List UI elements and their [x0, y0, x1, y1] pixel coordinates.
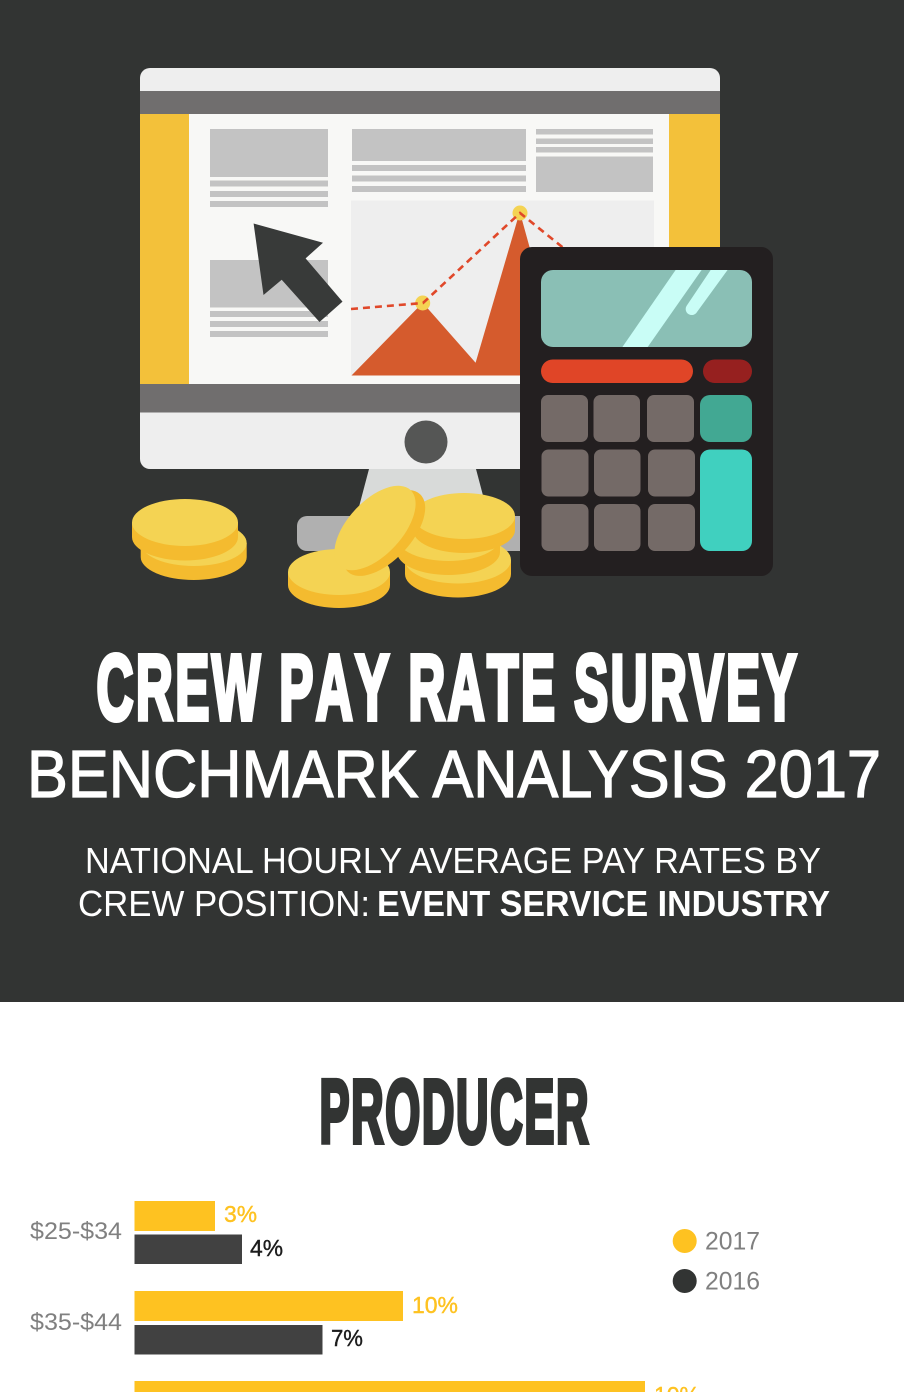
description text: EVENT SERVICE INDUSTRY: [377, 883, 830, 924]
icon: left coin stack: [132, 499, 247, 580]
description text: CREW POSITION:: [78, 883, 370, 924]
description text: [78, 840, 830, 924]
row: $35-$44: 10%: [412, 1292, 458, 1318]
panel: white chart background: [0, 1002, 904, 1392]
chart on monitor screen: [351, 200, 654, 376]
row: $25-$34: [30, 1201, 283, 1264]
row: $35-$44: $35-$44: [30, 1309, 122, 1336]
illustration: calculator: [520, 247, 773, 576]
row: $25-$34: 3%: [224, 1201, 257, 1227]
legend: 2016: [705, 1268, 760, 1296]
row: $35-$44: [30, 1291, 458, 1354]
row: $25-$34: $25-$34: [30, 1218, 122, 1245]
row: cropped third bar: [134, 1381, 700, 1392]
legend: [673, 1228, 760, 1296]
legend: 2017: [705, 1228, 760, 1256]
panel: dark header background: [0, 0, 904, 1002]
row: $35-$44: 7%: [331, 1325, 363, 1351]
row: $25-$34: 4%: [250, 1235, 283, 1261]
title: CREW PAY RATE SURVEY: [96, 635, 797, 739]
bar chart: producer pay rates: [30, 1201, 700, 1392]
illustration: computer monitor: [140, 68, 720, 551]
heading: producer: PRODUCER: [320, 1063, 588, 1163]
icon: mouse cursor arrow: [254, 224, 342, 322]
description text: NATIONAL HOURLY AVERAGE PAY RATES BY: [85, 840, 821, 881]
icon: centre coin pile: [288, 472, 515, 608]
